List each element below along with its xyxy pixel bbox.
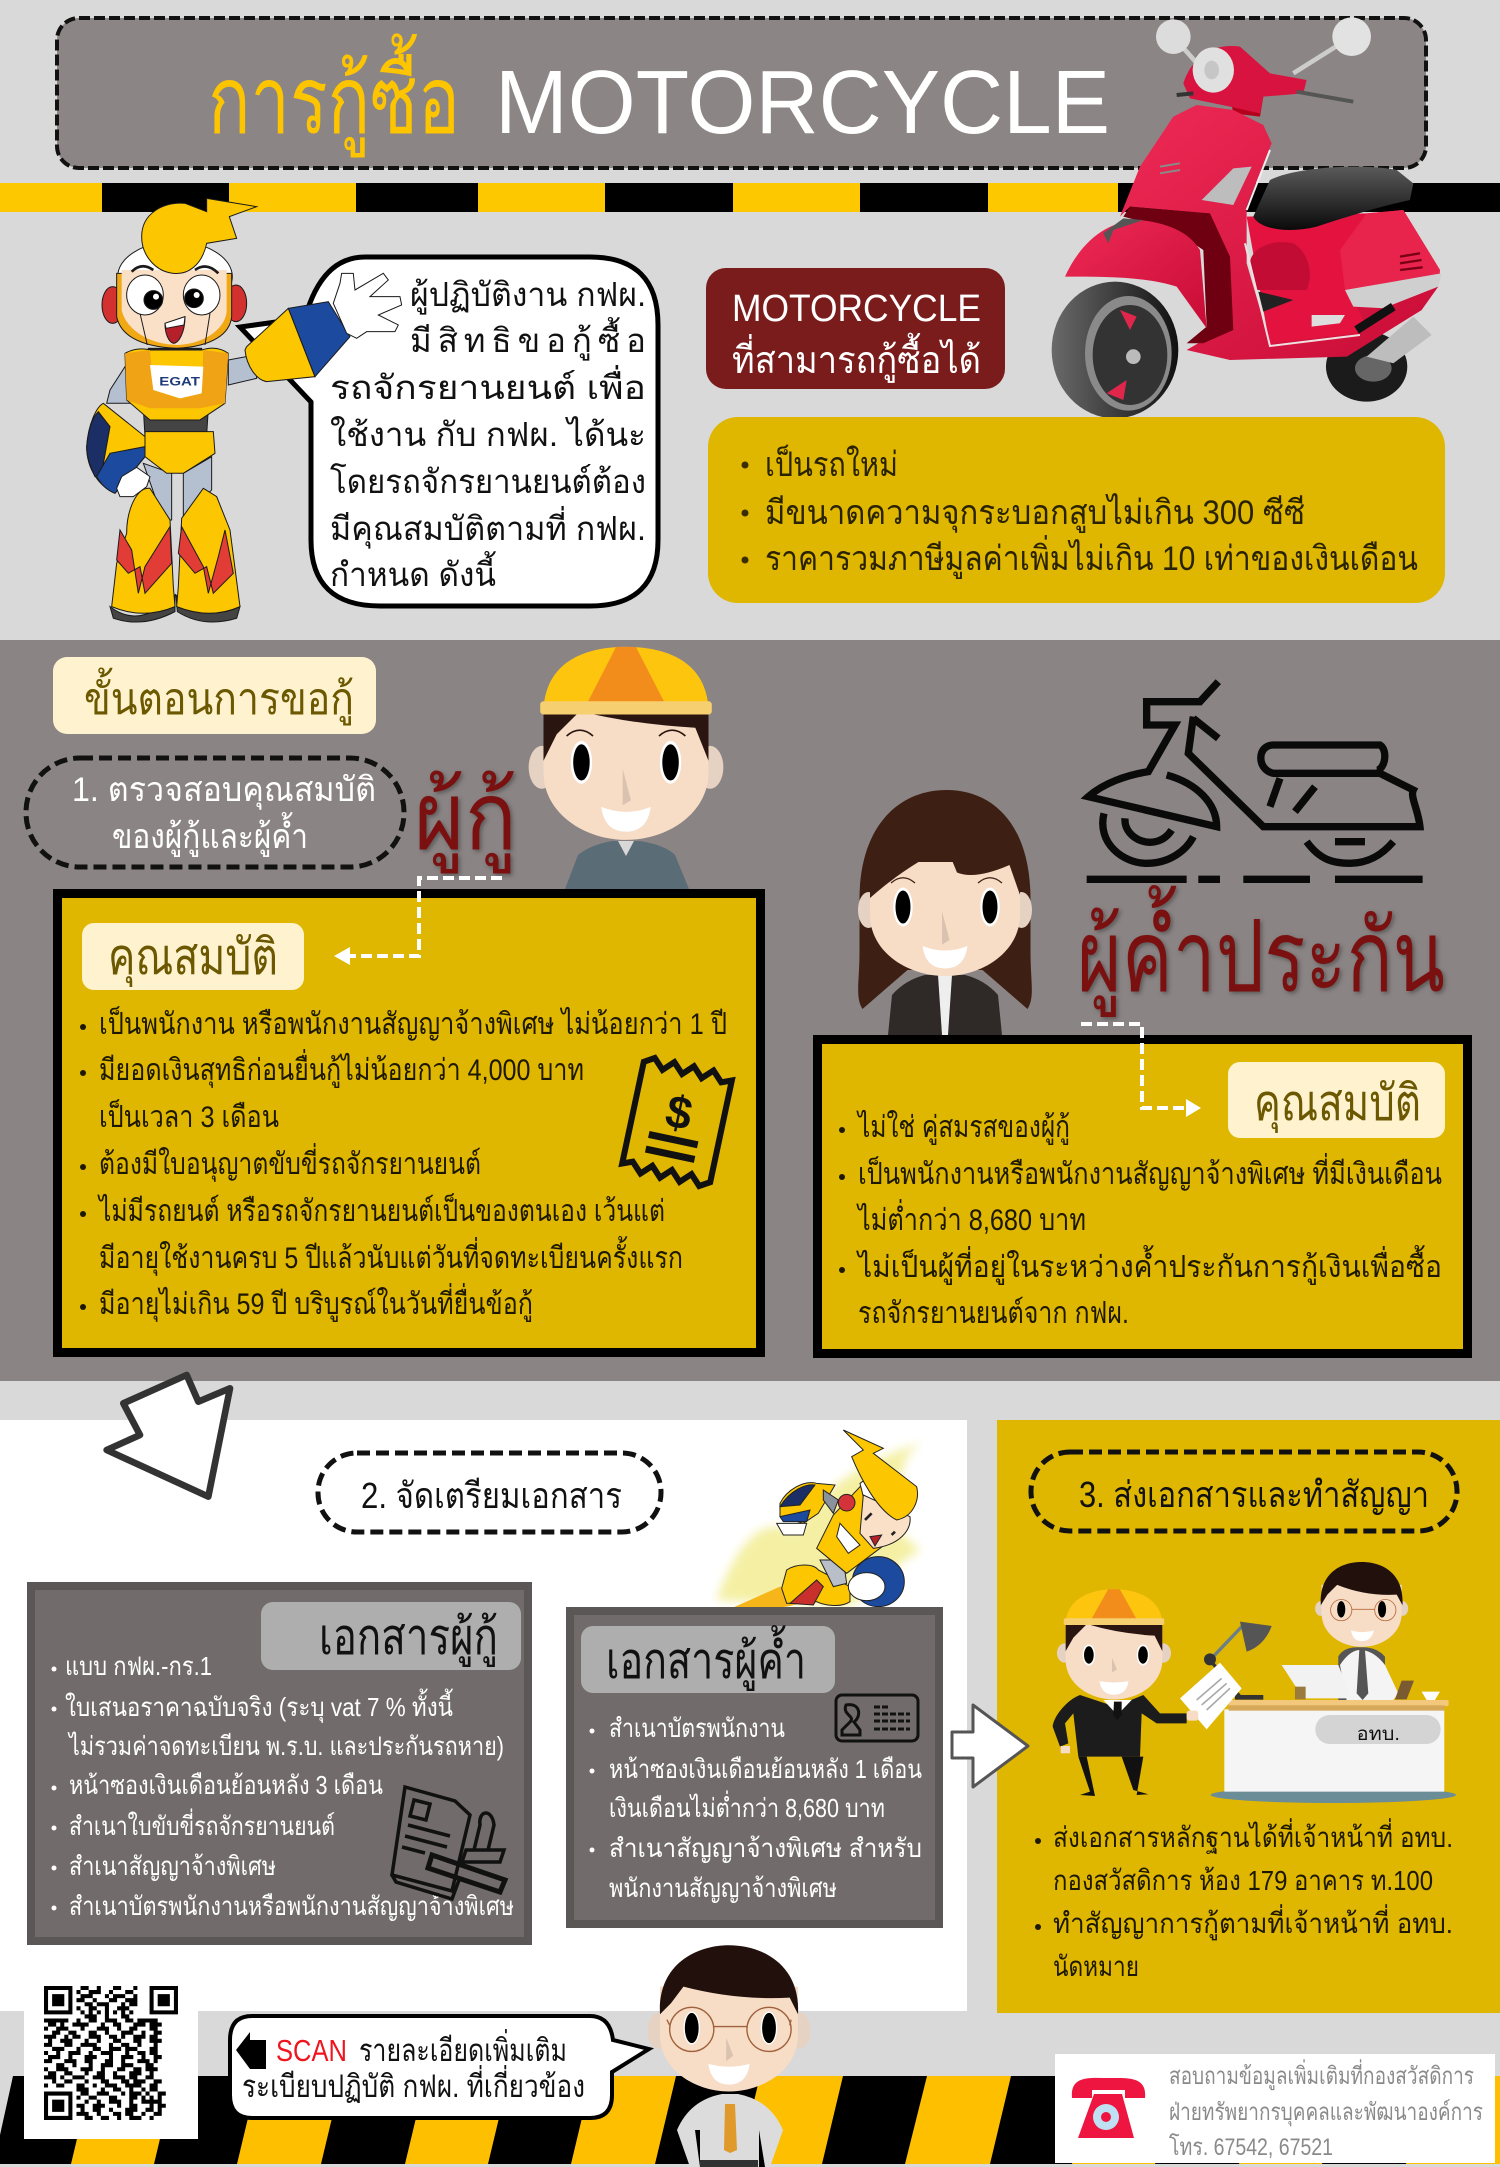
panel: eligible motorcycle heading: MOTORCYCLE <box>732 288 981 330</box>
arrow: borrower to qualifications <box>334 878 502 965</box>
icon: guarantor woman <box>858 790 1032 1035</box>
scan text: ระเบียบปฏิบัติ กฟผ. ที่เกี่ยวข้อง <box>242 2065 585 2104</box>
panel: step 3 yellow background <box>997 1420 1500 2013</box>
icon: receipt <box>621 1056 733 1188</box>
guarantor qualification list: ไม่ต่ำกว่า 8,680 บาท <box>856 1199 1086 1237</box>
borrower qualification list: เป็นเวลา 3 เดือน <box>99 1098 279 1134</box>
desk lamp <box>1204 1622 1272 1700</box>
intro text: ผู้ปฏิบัติงาน กฟผ. <box>410 276 646 315</box>
step 3 list: ทำสัญญาการกู้ตามที่เจ้าหน้าที่ อทบ. <box>1053 1904 1453 1941</box>
guarantor documents list: พนักงานสัญญาจ้างพิเศษ <box>609 1873 837 1903</box>
label: borrower documents: เอกสารผู้กู้ <box>319 1609 498 1667</box>
borrower documents list: ใบเสนอราคาฉบับจริง (ระบุ vat 7 % ทั้งนี้ <box>65 1688 453 1723</box>
panel: eligible motorcycle heading <box>706 268 1005 389</box>
guarantor qualification list: ไม่เป็นผู้ที่อยู่ในระหว่างค้ำประกันการกู้เงินเพื่อซื้อ <box>856 1245 1442 1285</box>
panel: eligible motorcycle heading: ที่สามารถกู้ซื้อได้ <box>732 332 981 383</box>
step 1 pill <box>26 758 404 867</box>
icon: receipt: $ <box>661 1084 697 1140</box>
step 1 pill: ของผู้กู้และผู้ค้ำ <box>112 812 308 857</box>
desk shadow <box>1211 1787 1456 1803</box>
guarantor documents list <box>590 1713 922 1903</box>
icon: scooter outline <box>1087 682 1423 879</box>
borrower qualification list: ไม่มีรถยนต์ หรือรถจักรยานยนต์เป็นของตนเอง เว้นแต่ <box>97 1192 665 1228</box>
heading: loan steps <box>53 657 376 734</box>
scan text: รายละเอียดเพิ่มเติม <box>359 2029 567 2068</box>
guarantor documents list: หน้าซองเงินเดือนย้อนหลัง 1 เดือน <box>609 1754 922 1784</box>
step 1 pill: 1. ตรวจสอบคุณสมบัติ <box>72 771 376 810</box>
scan text <box>242 2029 585 2104</box>
pencil cup <box>1295 1687 1306 1699</box>
borrower documents list <box>52 1651 514 1921</box>
panel: motorcycle conditions: มีขนาดความจุกระบอกสูบไม่เกิน 300 ซีซี <box>765 493 1305 533</box>
guarantor documents list: สำเนาบัตรพนักงาน <box>609 1713 785 1743</box>
icon: man with glasses <box>648 1945 810 2167</box>
borrower documents list: ไม่รวมค่าจดทะเบียน พ.ร.บ. และประกันรถหาย) <box>67 1731 504 1761</box>
guarantor qualification list: ไม่ใช่ คู่สมรสของผู้กู้ <box>856 1109 1070 1145</box>
arrow: guarantor to qualifications <box>1081 1024 1201 1117</box>
borrower documents list: แบบ กฟผ.-กร.1 <box>65 1651 212 1681</box>
label: qualifications: คุณสมบัติ <box>1254 1075 1421 1133</box>
panel: documents white background <box>0 1420 967 2011</box>
icon: borrower with helmet <box>529 647 723 889</box>
label: guarantor documents: เอกสารผู้ค้ำ <box>606 1625 806 1691</box>
borrower documents list: สำเนาสัญญาจ้างพิเศษ <box>69 1851 276 1881</box>
borrower qualification list: มียอดเงินสุทธิก่อนยื่นกู้ไม่น้อยกว่า 4,000 บาท <box>99 1049 584 1089</box>
top hazard stripe <box>0 183 1500 212</box>
icon: running mascot <box>717 1430 920 1613</box>
speech bubble: intro <box>240 257 658 606</box>
intro text: มีคุณสมบัติตามที่ กฟผ. <box>330 506 646 549</box>
title banner <box>57 18 1426 168</box>
intro text: โดยรถจักรยานยนต์ต้อง <box>330 463 646 500</box>
panel: loan procedure background <box>0 640 1500 1381</box>
employee in helmet <box>1053 1589 1187 1796</box>
panel: contact <box>1055 2054 1495 2163</box>
borrower documents list: สำเนาบัตรพนักงานหรือพนักงานสัญญาจ้างพิเศษ <box>69 1891 514 1921</box>
bottom hazard stripe <box>0 2076 1500 2164</box>
step 3 list <box>1035 1818 1453 1982</box>
step 3 pill <box>1031 1452 1457 1531</box>
icon: documents and pen <box>392 1787 505 1899</box>
title text <box>208 33 1110 158</box>
label: qualifications <box>1228 1062 1445 1138</box>
panel: motorcycle conditions: ราคารวมภาษีมูลค่าเพิ่มไม่เกิน 10 เท่าของเงินเดือน <box>765 535 1418 579</box>
step 2 pill <box>318 1453 661 1532</box>
icon: red telephone <box>1072 2078 1145 2138</box>
borrower qualification list: ต้องมีใบอนุญาตขับขี่รถจักรยานยนต์ <box>99 1143 481 1183</box>
label: borrower documents <box>261 1602 521 1670</box>
desk: อทบ. <box>1357 1724 1400 1745</box>
guarantor qualification list: รถจักรยานยนต์จาก กฟผ. <box>858 1296 1129 1330</box>
speech bubble: scan <box>230 2016 649 2118</box>
laptop <box>1282 1665 1352 1698</box>
intro text <box>330 276 646 593</box>
guarantor documents list: เงินเดือนไม่ต่ำกว่า 8,680 บาท <box>609 1790 885 1823</box>
step 3 pill: 3. ส่งเอกสารและทำสัญญา <box>1079 1474 1429 1515</box>
mascot badge: EGAT <box>159 374 201 388</box>
icon: ID card <box>836 1695 918 1741</box>
arrow: large down-right <box>107 1375 230 1497</box>
panel: motorcycle conditions <box>708 417 1445 603</box>
document in hand <box>1180 1663 1242 1729</box>
icon: red scooter <box>1052 17 1442 418</box>
borrower qualification list: เป็นพนักงาน หรือพนักงานสัญญาจ้างพิเศษ ไม่น้อยกว่า 1 ปี <box>99 1005 727 1041</box>
contact text <box>1169 2059 1483 2161</box>
panel: motorcycle conditions: เป็นรถใหม่ <box>765 444 898 484</box>
borrower documents list: สำเนาใบขับขี่รถจักรยานยนต์ <box>69 1808 335 1841</box>
intro text: มีสิทธิขอกู้ซื้อ <box>410 317 646 361</box>
arrow: to step 3 <box>952 1705 1028 1787</box>
illustration: submitting documents <box>1053 1562 1456 1803</box>
borrower qualification list <box>80 1005 727 1323</box>
borrower qualification list: มีอายุไม่เกิน 59 ปี บริบูรณ์ในวันที่ยื่นข้อกู้ <box>99 1283 533 1323</box>
heading: loan steps: ขั้นตอนการขอกู้ <box>84 667 354 726</box>
desk <box>1224 1681 1449 1792</box>
intro text: รถจักรยานยนต์ เพื่อ <box>330 365 646 406</box>
label: guarantor documents <box>581 1625 835 1693</box>
guarantor qualification list <box>839 1109 1442 1330</box>
title text: การกู้ซื้อ <box>208 33 460 158</box>
guarantor documents list: สำเนาสัญญาจ้างพิเศษ สำหรับ <box>609 1833 922 1863</box>
staff with glasses <box>1315 1562 1408 1700</box>
intro text: ใช้งาน กับ กฟผ. ได้นะ <box>330 416 646 453</box>
panel: guarantor documents <box>570 1611 939 1924</box>
label: qualifications: คุณสมบัติ <box>108 929 278 987</box>
icon: black arrow <box>236 2032 266 2069</box>
intro text: กำหนด ดังนี้ <box>330 551 497 593</box>
panel: borrower documents <box>31 1586 528 1941</box>
step 2 pill: 2. จัดเตรียมเอกสาร <box>361 1475 622 1516</box>
panel: guarantor qualifications <box>818 1040 1468 1354</box>
step 3 list: กองสวัสดิการ ห้อง 179 อาคาร ท.100 <box>1053 1865 1433 1896</box>
QR code <box>24 1986 198 2139</box>
borrower qualification list: มีอายุใช้งานครบ 5 ปีแล้วนับแต่วันที่จดทะเบียนครั้งแรก <box>99 1236 683 1277</box>
title text: MOTORCYCLE <box>495 53 1110 153</box>
scan text: SCAN <box>276 2033 347 2068</box>
step 3 list: นัดหมาย <box>1053 1951 1139 1982</box>
heading: borrower: ผู้กู้ <box>414 764 517 874</box>
panel: borrower qualifications <box>58 894 760 1352</box>
contact text: โทร. 67542, 67521 <box>1169 2133 1333 2161</box>
step 3 list: ส่งเอกสารหลักฐานได้ที่เจ้าหน้าที่ อทบ. <box>1053 1818 1453 1854</box>
borrower documents list: หน้าซองเงินเดือนย้อนหลัง 3 เดือน <box>69 1770 383 1800</box>
icon: mascot pointing <box>87 198 402 622</box>
